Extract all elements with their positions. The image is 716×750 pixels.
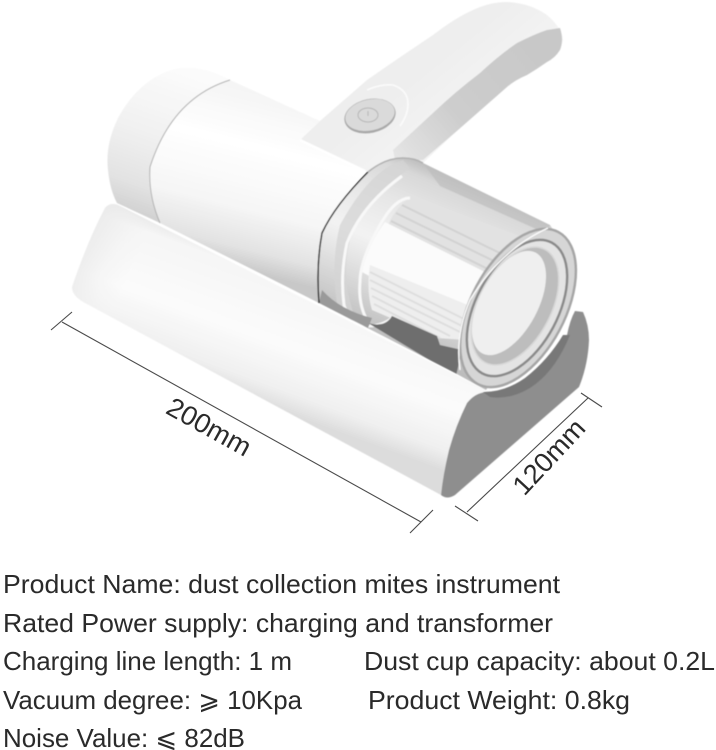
collar light band	[343, 176, 402, 326]
power button	[341, 94, 399, 138]
base left end shading	[72, 204, 150, 315]
handle	[300, 2, 563, 172]
motor end cap	[107, 68, 230, 223]
filter white band	[362, 222, 484, 304]
dark lower cup interior	[368, 316, 462, 376]
lens window	[457, 239, 561, 367]
cup top edge band	[432, 174, 549, 229]
cup dark joint line	[318, 172, 368, 303]
spec: product name: Product Name: dust collection mites instrument	[3, 569, 561, 599]
spec: vacuum degree: Vacuum degree: ⩾ 10Kpa	[3, 685, 303, 715]
filter upper pleats	[390, 215, 494, 271]
spec: rated power supply: Rated Power supply: charging and transformer	[3, 608, 553, 638]
rim white edge	[459, 228, 548, 370]
cap seam line	[150, 80, 230, 223]
handle shadow side	[393, 28, 562, 160]
switch panel edge highlight	[300, 140, 365, 171]
specification list	[3, 569, 715, 750]
dimension: 200mm	[51, 312, 433, 533]
dimension: 120mm	[455, 393, 602, 521]
product illustration: vacuum on base	[72, 2, 600, 498]
base grey end face	[441, 311, 589, 498]
dimension: 200mm: 200mm	[161, 392, 257, 462]
transparent dust cup	[318, 158, 552, 390]
button recess highlight	[367, 85, 408, 126]
dimension: 120mm: 120mm	[507, 413, 591, 501]
cup front rim rings	[436, 210, 600, 406]
spec: product weight: Product Weight: 0.8kg	[368, 685, 630, 715]
filter lower pleats	[368, 266, 466, 340]
cup rear rim arc	[368, 158, 423, 172]
motor body	[149, 80, 365, 303]
filter cap outline	[360, 198, 410, 322]
spec: charging line length: Charging line length: 1 m	[3, 646, 292, 676]
base shadow under rim	[483, 335, 570, 398]
base roller top surface	[72, 204, 486, 495]
spec: dust cup capacity: Dust cup capacity: about 0.2L	[364, 646, 715, 676]
collar translucent band	[336, 176, 390, 310]
